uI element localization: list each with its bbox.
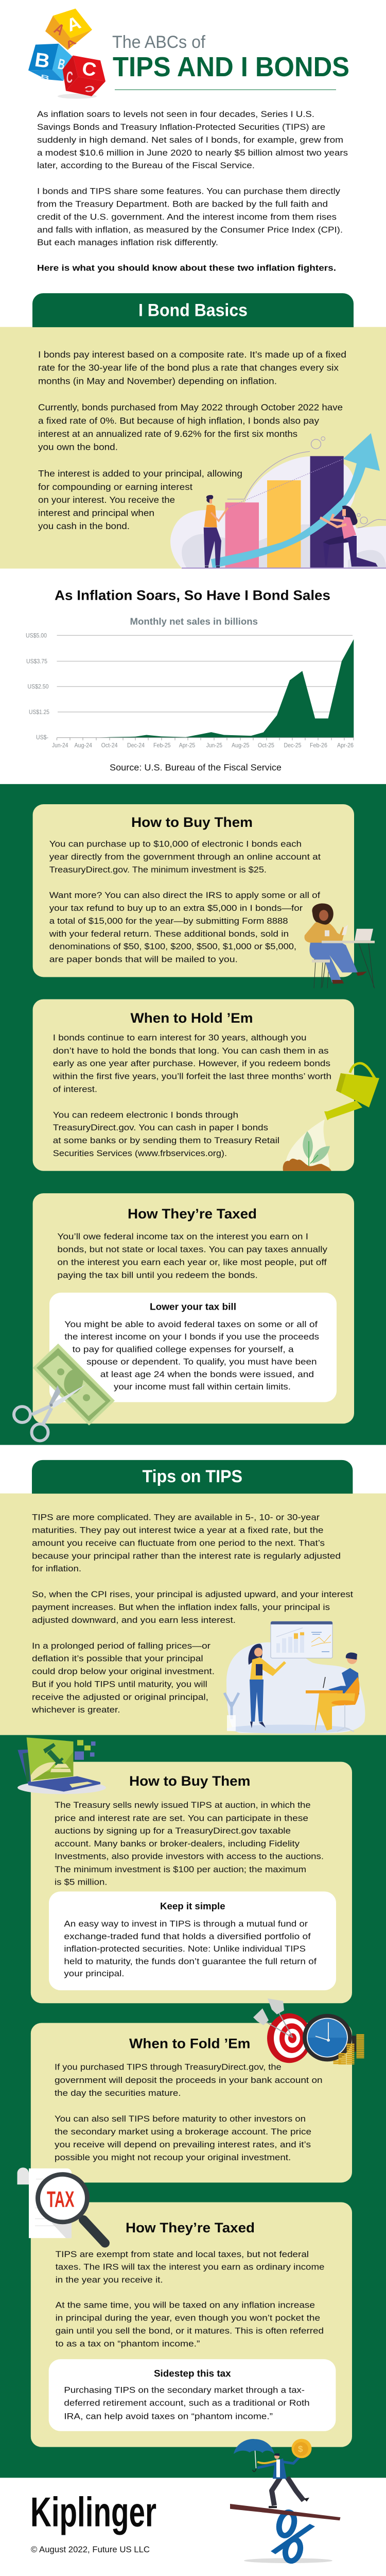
TIPS text: So, when the CPI rises, your principal is adjusted upward, and your interest: [32, 1589, 353, 1599]
card: How They're Taxed: in the year you receive it.: [56, 2275, 163, 2285]
card: How They're Taxed: How They’re Taxed: [128, 1206, 257, 1222]
card: When to Hold 'Em: [33, 999, 379, 1171]
I bond text: [38, 349, 346, 531]
card: How to Buy Them: How to Buy Them: [129, 1773, 251, 1789]
intro text: credit of the U.S. government. And the interest income from them rises: [37, 212, 337, 222]
TIPS text: deflation it’s possible that your principal: [32, 1653, 203, 1663]
intro text: later, according to the Bureau of the Fiscal Service.: [37, 160, 255, 171]
x axis labels: Oct-24: [101, 742, 118, 749]
I bond text: on your interest. You receive the: [38, 495, 175, 505]
icon: alphabet blocks: A: [51, 20, 67, 39]
intro text: Here is what you should know about these two inflation fighters.: [37, 263, 336, 273]
TIPS text: [31, 1512, 353, 1715]
intro text: Savings Bonds and Treasury Inflation-Protected Securities (TIPS) are: [37, 122, 325, 132]
card: When to Fold 'Em: possible you might not recoup your original investment.: [55, 2152, 291, 2162]
card: How to Buy Them: Investments, also provide investors with access to the auctions.: [55, 1851, 324, 1861]
I bond text: months (in May and November) depending on inflation.: [38, 376, 277, 386]
illustration: businessman balancing on percent sign: [230, 2439, 341, 2563]
card: How They're Taxed: At the same time, you will be taxed on any inflation increase: [56, 2300, 315, 2310]
card: How to Buy Them: a total of $15,000 for the year—by submitting Form 8888: [49, 916, 288, 926]
card: How to Buy Them: year directly from the government through an online account at: [49, 852, 321, 862]
x axis labels: Feb-25: [153, 742, 171, 749]
TIPS text: payment increases. But when the inflation index falls, your principal is: [32, 1602, 330, 1612]
illustration: scissors cutting dollar bill: [14, 1344, 115, 1441]
icon: alphabet blocks: C: [81, 57, 98, 80]
I bond text: you cash in the bond.: [38, 521, 130, 531]
callout: Sidestep this tax: deferred retirement account, such as a traditional or Roth: [64, 2398, 310, 2408]
callout: Sidestep this tax: [49, 2359, 336, 2431]
heading: Tips on TIPS: [32, 1460, 353, 1494]
callout: Sidestep this tax: Purchasing TIPS on the secondary market through a tax-: [64, 2385, 305, 2395]
heading: I Bond Basics: [32, 293, 354, 327]
I bond text: The interest is added to your principal, allowing: [38, 468, 242, 479]
illustration: businessman balancing on percent sign: $: [298, 2445, 303, 2454]
I bond text: for compounding or earning interest: [38, 482, 192, 492]
panel: I Bond Basics: [0, 293, 386, 569]
TIPS text: receive the adjusted or original principal,: [32, 1692, 208, 1702]
title: The ABCs of: [112, 32, 205, 52]
y axis labels: US$2.50: [28, 683, 49, 690]
icon: tax receipt under magnifying glass: TAX: [47, 2187, 75, 2212]
callout: Lower your tax bill: spouse or dependent. To qualify, you must have been: [86, 1357, 317, 1367]
card: How to Buy Them: [17, 1737, 352, 2003]
card: When to Hold 'Em: I bonds continue to earn interest for 30 years, although you: [53, 1032, 306, 1043]
callout: Keep it simple: exchange-traded fund that holds a diversified portfolio of: [64, 1931, 311, 1941]
TIPS text: because your principal rather than the interest rate is regularly adjusted: [32, 1551, 341, 1561]
card: How They're Taxed: taxes. The IRS will tax the interest you earn as ordinary income: [56, 2262, 324, 2272]
card: How They're Taxed: [31, 2202, 352, 2447]
y axis labels: US$5.00: [26, 632, 47, 639]
x axis labels: Jun-24: [52, 742, 68, 749]
I bond text: a fixed rate of 0%. But because of high inflation, I bonds also pay: [38, 416, 319, 426]
chart source: Source: U.S. Bureau of the Fiscal Service: [110, 762, 282, 772]
callout: Lower your tax bill: You might be able to avoid federal taxes on some or all of: [64, 1319, 318, 1329]
card: How They're Taxed: How They’re Taxed: [126, 2219, 255, 2235]
callout: Keep it simple: An easy way to invest in TIPS is through a mutual fund or: [64, 1919, 308, 1929]
icon: alphabet blocks: C: [65, 69, 74, 87]
x axis labels: Dec-25: [284, 742, 302, 749]
area chart: monthly net sales: [26, 632, 354, 749]
callout: Lower your tax bill: [49, 1293, 337, 1402]
card: How to Buy Them: Want more? You can also direct the IRS to apply some or all of: [49, 890, 320, 900]
x axis labels: Dec-24: [127, 742, 145, 749]
icon: alphabet blocks: B: [40, 74, 50, 82]
intro text: [37, 109, 348, 273]
callout: Keep it simple: Keep it simple: [160, 1901, 225, 1911]
card: How They're Taxed: TIPS are exempt from state and local taxes, but not federal: [56, 2249, 309, 2259]
illustration: target, darts, clock and coins: [253, 1998, 360, 2064]
card: How They're Taxed: on the interest you earn each year or, like most people, put off: [57, 1257, 327, 1267]
TIPS text: TIPS are more complicated. They are available in 5-, 10- or 30-year: [32, 1512, 320, 1522]
y axis labels: US$1.25: [29, 708, 49, 716]
card: When to Fold 'Em: the day the securities mature.: [55, 2088, 181, 2098]
card: How They're Taxed: [14, 1193, 354, 1441]
x axis labels: Aug-24: [74, 742, 92, 749]
card: How to Buy Them: The Treasury sells newly issued TIPS at auction, in which the: [55, 1800, 311, 1810]
card: When to Fold 'Em: When to Fold ’Em: [129, 2036, 251, 2051]
I bond text: you own the bond.: [38, 442, 118, 452]
logo: Kiplinger: Kiplinger: [30, 2489, 156, 2535]
icon: alphabet blocks: B: [56, 56, 66, 74]
card: When to Hold 'Em: at some banks or by sending them to Treasury Retail: [53, 1135, 279, 1145]
TIPS text: adjusted downward, and you earn less interest.: [32, 1615, 236, 1625]
card: When to Hold 'Em: of interest.: [53, 1084, 97, 1094]
title: [112, 32, 349, 90]
x axis labels: Aug-25: [232, 742, 250, 749]
card: How to Buy Them: The minimum investment is $100 per auction; the maximum: [55, 1864, 306, 1874]
callout: Lower your tax bill: at least age 24 when the bonds were issued, and: [100, 1369, 314, 1379]
card: How to Buy Them: How to Buy Them: [131, 815, 253, 830]
card: How They're Taxed: paying the tax bill until you redeem the bonds.: [57, 1270, 258, 1280]
card: How to Buy Them: auctions by signing up for a TreasuryDirect.gov taxable: [55, 1825, 291, 1836]
TIPS text: But if you hold TIPS until maturity, you will: [32, 1679, 207, 1689]
card: When to Fold 'Em: the secondary market using a brokerage account. The price: [55, 2127, 311, 2137]
card: How to Buy Them: TreasuryDirect.gov. The minimum investment is $25.: [49, 865, 267, 875]
illustration: woman at desk: [305, 904, 375, 988]
callout: Lower your tax bill: Lower your tax bill: [150, 1301, 236, 1312]
intro text: and falls with inflation, as measured by the Consumer Price Index (CPI).: [37, 225, 343, 234]
copyright: © August 2022, Future US LLC: [31, 2545, 150, 2554]
intro text: suddenly in high demand. Net sales of I bonds, for example, grew from: [37, 134, 343, 145]
title: TIPS AND I BONDS: [113, 51, 349, 82]
y axis labels: US$3.75: [26, 657, 47, 665]
card: When to Fold 'Em: You can also sell TIPS before maturity to other investors on: [55, 2113, 306, 2124]
card: How They're Taxed: to as a tax on “phantom income.”: [56, 2338, 200, 2349]
x axis labels: Apr-26: [337, 742, 354, 749]
intro text: I bonds and TIPS share some features. You can purchase them directly: [37, 186, 340, 196]
heading: Tips on TIPS: Tips on TIPS: [142, 1466, 242, 1486]
panel: TIPS details green section: [0, 1735, 386, 2478]
card: How to Buy Them: is $5 million.: [55, 1877, 107, 1887]
I bond text: I bonds pay interest based on a composite rate. It’s made up of a fixed: [38, 349, 346, 360]
callout: Keep it simple: inflation-protected securities. Note: Unlike individual TIPS: [64, 1944, 306, 1954]
icon: alphabet blocks: A: [64, 37, 78, 50]
icon: alphabet blocks: A: [64, 12, 83, 36]
heading: I Bond Basics: I Bond Basics: [138, 300, 248, 320]
callout: Keep it simple: held to maturity, the funds don’t guarantee the full return of: [64, 1957, 317, 1966]
TIPS text: could drop below your original investment.: [32, 1666, 215, 1676]
TIPS text: for inflation.: [32, 1563, 81, 1573]
chart heading: [55, 587, 330, 627]
card: When to Fold 'Em: you receive will depend on prevailing interest rates, and it’s: [55, 2139, 311, 2149]
card: How They're Taxed: You’ll owe federal income tax on the interest you earn on I: [57, 1231, 308, 1241]
card: When to Fold 'Em: government will deposit the proceeds in your bank account on: [55, 2075, 323, 2085]
card: How They're Taxed: gain until you sell the bond, or it matures. This is often referred: [56, 2326, 324, 2335]
panel: Tips on TIPS: [0, 1460, 386, 1735]
y axis labels: [26, 632, 49, 741]
TIPS text: amount you receive can fluctuate from one period to the next. That’s: [32, 1538, 325, 1548]
card: How to Buy Them: [33, 804, 375, 988]
callout: Keep it simple: [49, 1891, 336, 1990]
I bond text: interest at an annualized rate of 9.62% for the first six months: [38, 429, 297, 439]
callout: Sidestep this tax: Sidestep this tax: [154, 2368, 231, 2379]
card: When to Fold 'Em: [31, 1998, 360, 2182]
card: When to Hold 'Em: early as one year after purchase. However, if you redeem bonds: [53, 1058, 330, 1068]
icon: alphabet blocks: [28, 9, 106, 99]
x axis labels: Apr-25: [179, 742, 195, 749]
x axis labels: Feb-26: [310, 742, 327, 749]
chart heading: Monthly net sales in billions: [130, 616, 258, 627]
card: How to Buy Them: price and interest rate are set. You can participate in these: [55, 1813, 308, 1823]
panel: I bond details green section: [0, 784, 386, 1445]
callout: Lower your tax bill: the interest income on your I bonds if you use the proceeds: [64, 1332, 319, 1342]
y axis labels: US$-: [36, 734, 48, 741]
illustration: watering can and seedling: [283, 1063, 379, 1171]
intro text: a modest $10.6 million in June 2020 to nearly $5 billion almost two years: [37, 147, 348, 158]
card: When to Hold 'Em: When to Hold ’Em: [131, 1010, 253, 1026]
callout: Lower your tax bill: to pay for qualified college expenses for yourself, a: [73, 1345, 294, 1354]
icon: alphabet blocks: B: [33, 48, 51, 73]
callout: Lower your tax bill: your income must fall within certain limits.: [114, 1382, 291, 1392]
x axis labels: Oct-25: [258, 742, 274, 749]
card: How They're Taxed: in principal during the year, even though you won’t pocket the: [56, 2313, 320, 2323]
intro text: from the Treasury Department. Both are backed by the full faith and: [37, 199, 328, 209]
callout: Keep it simple: your principal.: [64, 1969, 124, 1978]
card: When to Hold 'Em: Securities Services (www.frbservices.org).: [53, 1148, 227, 1158]
card: How They're Taxed: bonds, but not state or local taxes. You can pay taxes annually: [57, 1244, 327, 1255]
TIPS text: whichever is greater.: [31, 1704, 120, 1715]
icon: laptop auction gavel: [17, 1737, 106, 1794]
intro text: As inflation soars to levels not seen in four decades, Series I U.S.: [37, 109, 314, 119]
card: How to Buy Them: You can purchase up to $10,000 of electronic I bonds each: [49, 839, 302, 849]
x axis labels: [52, 742, 354, 749]
x axis labels: Jun-25: [206, 742, 222, 749]
chart heading: As Inflation Soars, So Have I Bond Sales: [55, 587, 330, 603]
card: How to Buy Them: are paper bonds that will be mailed to you.: [49, 954, 238, 964]
I bond text: Currently, bonds purchased from May 2022 through October 2022 have: [38, 402, 343, 413]
I bond text: rate for the 30-year life of the bond plus a rate that changes every six: [38, 363, 339, 373]
callout: Sidestep this tax: IRA, can help avoid taxes on “phantom income.”: [64, 2412, 273, 2421]
illustration: presenter and analyst: [224, 1621, 365, 1734]
card: How to Buy Them: account. Many banks or broker-dealers, including Fidelity: [55, 1838, 300, 1849]
card: When to Hold 'Em: TreasuryDirect.gov. You can cash in paper I bonds: [53, 1122, 268, 1132]
card: How to Buy Them: your tax refund to buy up to an extra $5,000 in I bonds—for: [49, 903, 303, 913]
card: How to Buy Them: denominations of $50, $100, $200, $500, $1,000 or $5,000,: [49, 941, 296, 951]
icon: tax receipt under magnifying glass: [17, 2167, 105, 2243]
I bond text: interest and principal when: [38, 508, 154, 518]
TIPS text: maturities. They pay out interest twice a year at a fixed rate, but the: [32, 1525, 323, 1535]
card: When to Hold 'Em: You can redeem electronic I bonds through: [53, 1110, 238, 1120]
intro text: But each manages inflation risk differently.: [37, 237, 218, 247]
illustration: people with rising bar chart: [170, 433, 386, 569]
card: How to Buy Them: with your federal return. These additional bonds, sold in: [49, 928, 289, 939]
card: When to Hold 'Em: don’t have to hold the bonds that long. You can cash them in as: [53, 1045, 328, 1056]
card: When to Fold 'Em: If you purchased TIPS through TreasuryDirect.gov, the: [55, 2062, 282, 2072]
TIPS text: In a prolonged period of falling prices—or: [32, 1640, 210, 1651]
card: When to Hold 'Em: within the first five years, you’ll forfeit the last three months’ worth: [52, 1071, 331, 1081]
icon: alphabet blocks: C: [84, 83, 95, 94]
